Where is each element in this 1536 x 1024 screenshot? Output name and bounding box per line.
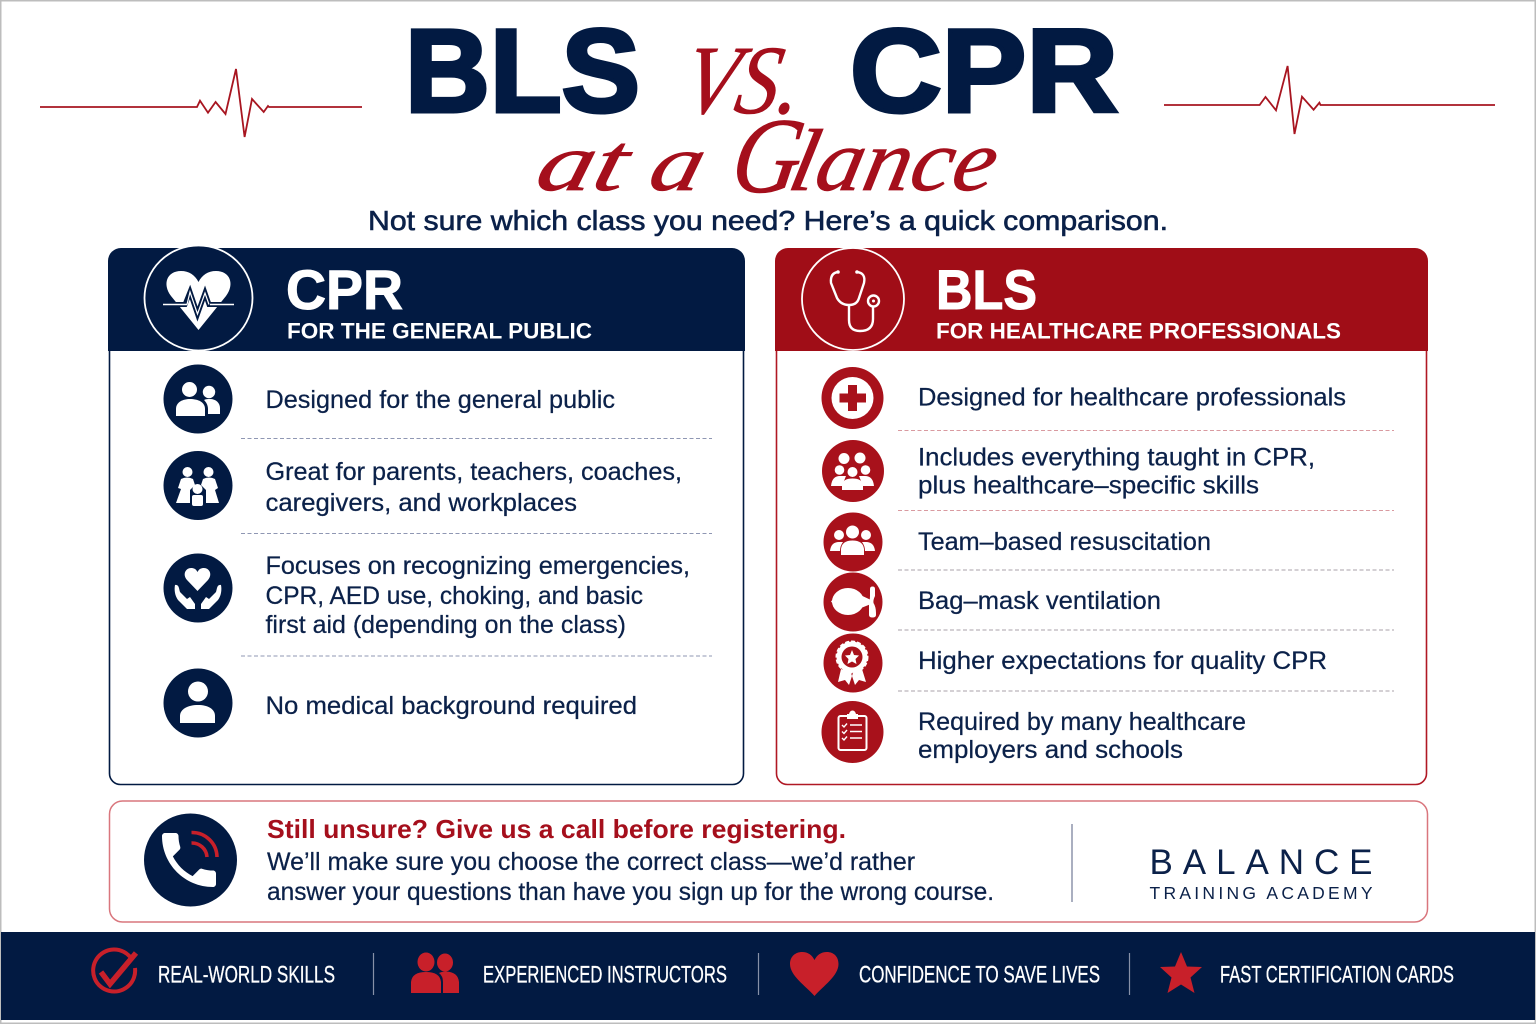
panel: BLS bbox=[775, 248, 1428, 784]
text: includes everything: plus healthcare–specific skills bbox=[918, 472, 1259, 500]
callout body text: We’ll make sure you choose the correct class—we’d rather bbox=[267, 848, 915, 876]
text: no medical background: No medical background required bbox=[266, 692, 637, 720]
text: includes everything bbox=[918, 444, 1315, 500]
text: focuses on: Focuses on recognizing emergencies, bbox=[266, 552, 690, 580]
panel: CPR bbox=[108, 246, 745, 784]
CPR heading: CPR bbox=[286, 258, 403, 321]
title: CPR bbox=[850, 6, 1118, 138]
text: focuses on: first aid (depending on the class) bbox=[266, 611, 626, 639]
BLS heading: BLS bbox=[936, 258, 1037, 321]
icon: stethoscope bbox=[802, 248, 904, 350]
title: BLS bbox=[405, 6, 640, 138]
icon: heart with pulse bbox=[144, 246, 252, 350]
text: team-based: Team–based resuscitation bbox=[918, 528, 1211, 556]
logo: Balance Training Academy: BALANCE bbox=[1150, 843, 1372, 882]
text: designed for the general public: Designed for the general public bbox=[266, 386, 615, 414]
icon: heart bbox=[790, 952, 838, 996]
BLS subheading: FOR HEALTHCARE PROFESSIONALS bbox=[936, 318, 1341, 344]
callout body text bbox=[267, 848, 994, 906]
icon: family bbox=[164, 451, 232, 520]
footer bar bbox=[1, 932, 1535, 1020]
icon: group with speech bubbles bbox=[822, 440, 884, 502]
icon: star bbox=[1160, 952, 1202, 993]
icon: right heartbeat line bbox=[1164, 66, 1495, 134]
text: includes everything: Includes everything taught in CPR, bbox=[918, 444, 1315, 472]
icon: medical cross bbox=[822, 367, 884, 429]
text: great for parents: Great for parents, teachers, coaches, bbox=[266, 458, 682, 486]
text: designed for healthcare professionals: Designed for healthcare professionals bbox=[918, 384, 1346, 412]
title: G bbox=[724, 96, 813, 216]
CPR header band bbox=[108, 248, 745, 351]
text: great for parents bbox=[266, 458, 682, 517]
text: focuses on: CPR, AED use, choking, and basic bbox=[266, 582, 643, 610]
icon: team bbox=[824, 512, 882, 572]
title: VS. bbox=[676, 27, 813, 135]
label: experienced instructors: EXPERIENCED INSTRUCTORS bbox=[483, 962, 727, 988]
icon: award rosette bbox=[824, 634, 882, 692]
title bbox=[405, 6, 1118, 216]
icon: person bbox=[164, 668, 232, 738]
text: required by: employers and schools bbox=[918, 736, 1183, 764]
title: a bbox=[642, 119, 716, 208]
text: required by: Required by many healthcare bbox=[918, 708, 1246, 736]
icon: phone bbox=[144, 814, 237, 906]
text: great for parents: caregivers, and workplaces bbox=[266, 489, 577, 517]
subtitle: Not sure which class you need? Here’s a quick comparison. bbox=[368, 205, 1168, 236]
logo: Balance Training Academy bbox=[1150, 843, 1373, 903]
title: at bbox=[528, 118, 641, 209]
BLS header band bbox=[775, 248, 1428, 351]
callout body text: answer your questions than have you sign up for the wrong course. bbox=[267, 878, 994, 906]
CPR subheading: FOR THE GENERAL PUBLIC bbox=[287, 318, 592, 344]
icon: clipboard bbox=[822, 701, 884, 763]
text: bag-mask: Bag–mask ventilation bbox=[918, 587, 1161, 615]
logo: Balance Training Academy: TRAINING ACADEMY bbox=[1150, 883, 1373, 903]
icon: two people bbox=[164, 364, 232, 434]
icon: left heartbeat line bbox=[40, 69, 362, 137]
icon: bag-mask bbox=[824, 572, 882, 632]
title: lance bbox=[782, 113, 1007, 210]
text: required by bbox=[918, 708, 1246, 764]
label: real-world skills: REAL-WORLD SKILLS bbox=[158, 962, 335, 988]
callout heading: Still unsure? Give us a call before registering. bbox=[267, 814, 846, 844]
icon: instructors bbox=[411, 952, 459, 993]
icon: hands holding heart bbox=[164, 554, 232, 622]
callout: still unsure bbox=[110, 801, 1428, 922]
text: focuses on bbox=[266, 552, 690, 639]
icon: check circle bbox=[93, 950, 136, 992]
text: higher expectations: Higher expectations for quality CPR bbox=[918, 647, 1327, 675]
label: confidence to save lives: CONFIDENCE TO SAVE LIVES bbox=[859, 962, 1100, 988]
